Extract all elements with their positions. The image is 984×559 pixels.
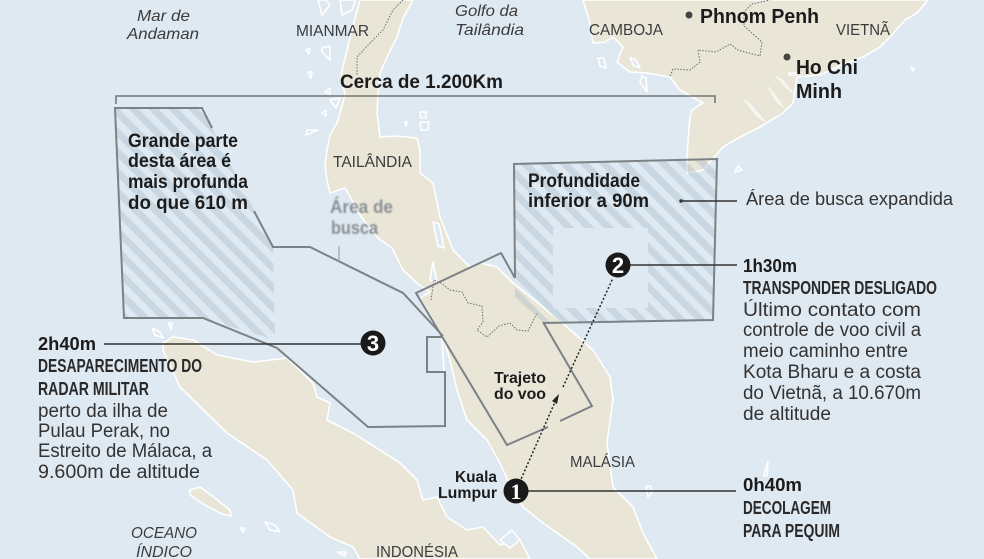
scale bracket <box>116 96 715 104</box>
callout: 1h30m transponder <box>743 256 937 425</box>
callout: 2h40m radar: perto da ilha de <box>38 401 168 422</box>
callout: 2h40m radar: RADAR MILITAR <box>38 379 149 399</box>
callout: 1h30m transponder: de altitude <box>743 404 831 425</box>
city: Ho Chi Minh <box>784 54 858 103</box>
marker 2: 2 <box>612 253 624 278</box>
leader lines <box>104 199 737 491</box>
annotation: deep area <box>128 131 248 214</box>
national borders <box>357 0 770 337</box>
hatched area: expanded search zone <box>514 159 717 322</box>
annotation: deep area: mais profunda <box>128 172 248 193</box>
outline: expanded search box <box>514 159 717 323</box>
annotation: flight path: Trajeto <box>494 370 546 387</box>
annotation: flight path <box>494 370 546 403</box>
outline: western search area <box>115 108 445 427</box>
land: Indochina <box>583 0 928 173</box>
land: Sumatra <box>163 337 530 559</box>
geographic labels: TAILÂNDIA <box>333 152 412 171</box>
city: Kuala Lumpur: Lumpur <box>438 485 497 502</box>
label: blurred search area <box>330 196 393 238</box>
city: Phnom Penh: Phnom Penh <box>700 6 819 28</box>
callout: 1h30m transponder: Último contato com <box>743 299 921 321</box>
callout: 2h40m radar: Pulau Perak, no <box>38 421 170 442</box>
geographic labels: Mar de <box>137 8 190 25</box>
callout: 1h30m transponder: 1h30m <box>743 256 797 276</box>
city: Kuala Lumpur: Kuala <box>455 469 497 486</box>
annotation: flight path: do voo <box>494 386 546 403</box>
geographic labels: CAMBOJA <box>589 22 663 39</box>
callout: 1h30m transponder: do Vietnã, a 10.670m <box>743 383 921 404</box>
label: expanded search area: Área de busca expandida <box>746 189 954 209</box>
marker 3: 3 <box>367 331 379 356</box>
land: Thai-Malay peninsula <box>325 0 657 559</box>
annotation: deep area: desta área é <box>128 151 231 172</box>
callout: 1h30m transponder: meio caminho entre <box>743 341 908 362</box>
annotation: shallow area: Profundidade <box>528 171 640 192</box>
geographic labels: Andaman <box>126 26 199 43</box>
scale label: Cerca de 1.200Km <box>340 72 503 93</box>
geographic labels: MIANMAR <box>296 23 369 40</box>
callout: 0h40m takeoff <box>743 475 840 541</box>
leader: Área de busca <box>338 246 340 262</box>
islands: coastal outlines <box>152 0 914 556</box>
city: Kuala Lumpur <box>438 469 497 502</box>
geographic labels: MALÁSIA <box>570 452 635 471</box>
city: Ho Chi Minh: Ho Chi <box>796 57 858 79</box>
land: Nias island <box>190 487 231 516</box>
callout: 0h40m takeoff: PARA PEQUIM <box>743 521 840 541</box>
callout: 2h40m radar <box>38 334 212 483</box>
geographic labels <box>126 3 890 559</box>
annotation: shallow area: inferior a 90m <box>528 191 649 212</box>
callout: 2h40m radar: 2h40m <box>38 334 96 354</box>
geographic labels: VIETNÃ <box>836 19 890 39</box>
marker 2 <box>606 252 630 278</box>
label: blurred search area: busca <box>331 218 379 238</box>
dotted flight route with arrow <box>518 278 613 486</box>
annotation: deep area: do que 610 m <box>128 193 248 214</box>
search area outlines <box>115 108 717 445</box>
hatched area: deep search zone <box>115 108 275 340</box>
callout: 2h40m radar: 9.600m de altitude <box>38 462 200 483</box>
callout: 1h30m transponder: controle de voo civil a <box>743 320 921 341</box>
geographic labels: Golfo da <box>455 3 518 20</box>
callout: 1h30m transponder: Kota Bharu e a costa <box>743 362 921 383</box>
land masses <box>152 0 928 559</box>
geographic labels: OCEANO <box>131 525 197 542</box>
outline: flight path zone <box>416 253 592 445</box>
city: Ho Chi Minh: Minh <box>796 81 842 103</box>
callout: 0h40m takeoff: 0h40m <box>743 475 802 495</box>
callout: 0h40m takeoff: DECOLAGEM <box>743 498 831 518</box>
callout: 2h40m radar: Estreito de Málaca, a <box>38 441 212 462</box>
annotation: deep area: Grande parte <box>128 131 238 152</box>
annotation: shallow area <box>528 171 649 212</box>
label: blurred search area: Área de <box>330 196 393 217</box>
geographic labels: Tailândia <box>455 22 524 39</box>
marker 1: 1 <box>510 479 522 504</box>
marker 1 <box>504 478 528 504</box>
marker 3 <box>360 330 386 356</box>
callout: 2h40m radar: DESAPARECIMENTO DO <box>38 356 202 376</box>
